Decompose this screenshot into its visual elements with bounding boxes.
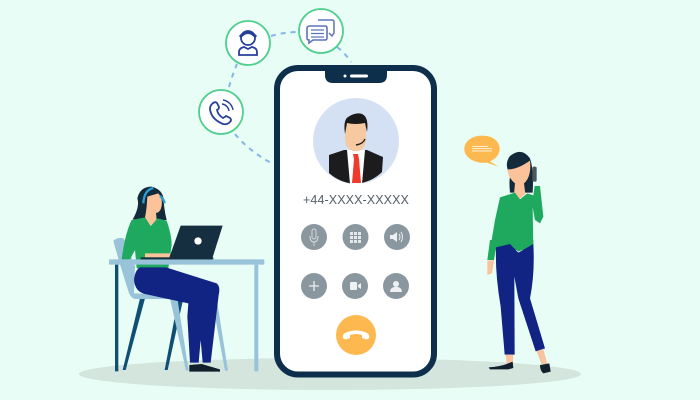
green hem xyxy=(487,240,533,260)
woman at desk with laptop xyxy=(109,187,264,372)
woman on the phone xyxy=(464,136,543,250)
shoes xyxy=(189,364,220,372)
chair xyxy=(113,238,228,371)
laptop xyxy=(141,226,223,259)
sweater xyxy=(122,217,172,268)
table xyxy=(109,259,264,371)
button: microphone xyxy=(301,224,327,250)
trousers xyxy=(496,244,545,355)
phone body xyxy=(277,68,434,374)
icon: chat bubbles xyxy=(299,9,343,53)
button: contact xyxy=(383,273,409,299)
face and neck xyxy=(507,161,530,200)
ankles xyxy=(506,349,547,364)
woman on the phone: lower body xyxy=(487,240,551,373)
jacket xyxy=(490,186,543,250)
phone number: +44-XXXX-XXXXX xyxy=(303,193,410,207)
contact avatar xyxy=(313,98,399,184)
hands xyxy=(145,253,170,257)
hand xyxy=(487,260,494,275)
neck and face xyxy=(145,193,162,226)
icon: phone call xyxy=(199,90,243,134)
speech bubble xyxy=(464,136,500,167)
phone notch xyxy=(325,68,387,83)
button: video xyxy=(342,273,368,299)
headset xyxy=(143,188,165,203)
shoes xyxy=(489,362,513,369)
trousers xyxy=(134,267,219,363)
ground shadow xyxy=(79,358,581,390)
icon: support agent xyxy=(226,21,270,65)
hair xyxy=(133,187,167,220)
button: speaker xyxy=(384,224,410,250)
button: end call xyxy=(336,315,376,355)
dashed connector arc xyxy=(229,32,351,163)
button: keypad xyxy=(342,224,368,250)
button: add xyxy=(301,273,327,299)
smartphone xyxy=(277,68,434,374)
phone in hand xyxy=(532,167,537,182)
hair xyxy=(507,152,533,193)
